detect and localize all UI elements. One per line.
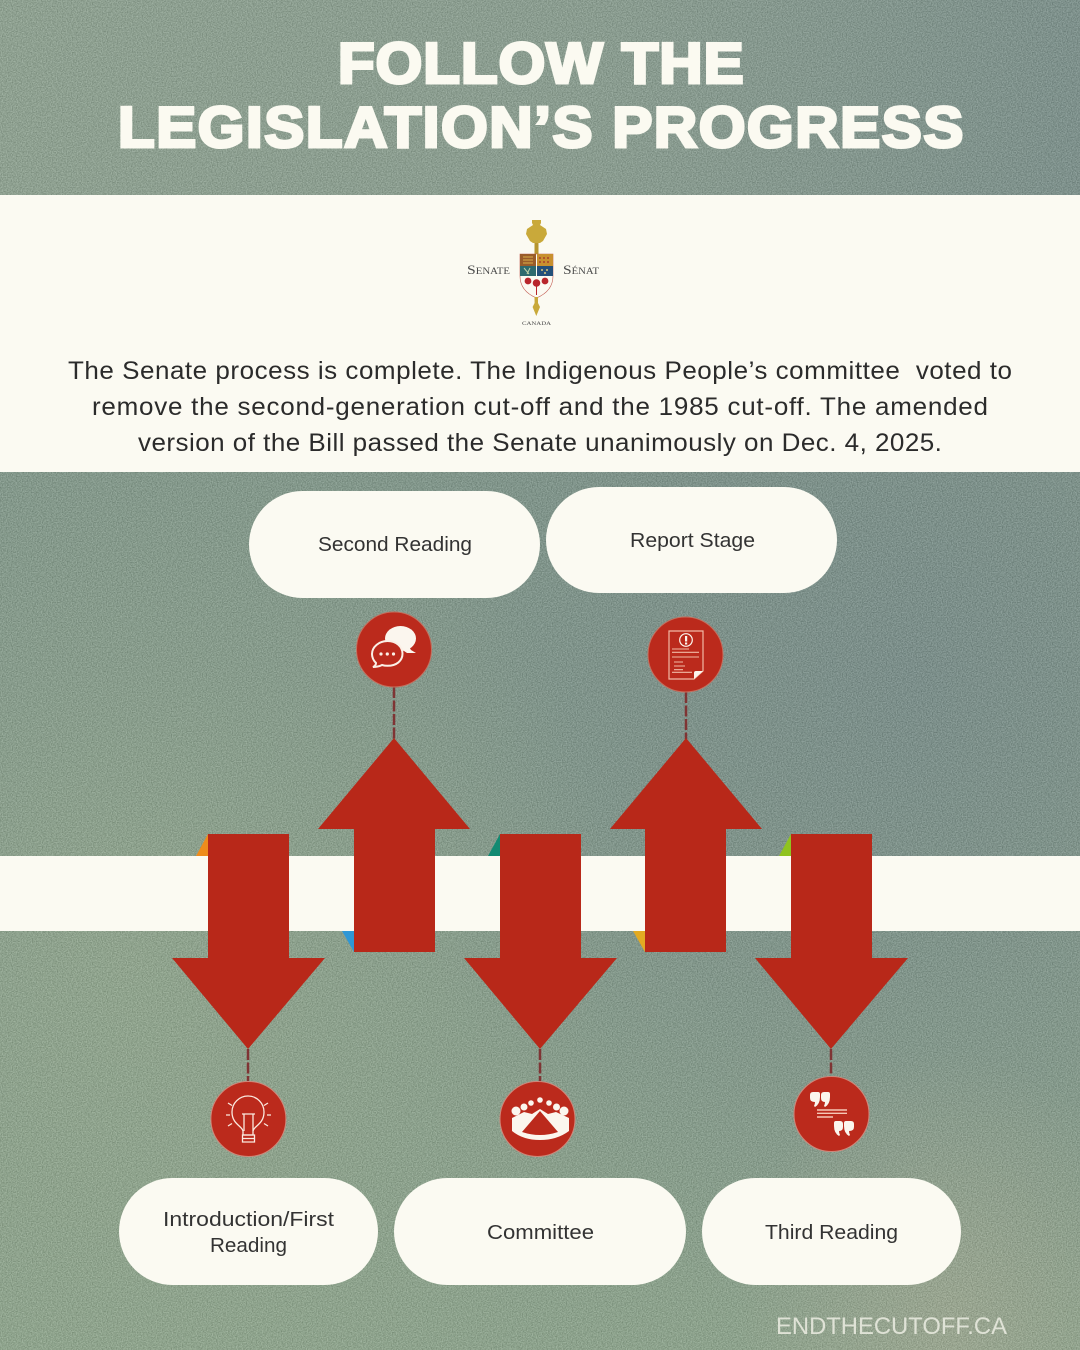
pill: second reading [249, 491, 540, 598]
icon: speech bubbles [356, 612, 432, 687]
mace foot [533, 297, 540, 316]
title: LEGISLATION’S PROGRESS [118, 96, 963, 160]
pill: report stage: Report Stage [630, 529, 755, 552]
arrow: introduction down [172, 834, 325, 1049]
icon: committee table [500, 1082, 575, 1156]
pill: second reading: Second Reading [318, 533, 472, 556]
title [118, 32, 963, 160]
arrow: third reading down [755, 834, 908, 1049]
icon: quotation marks [794, 1076, 869, 1152]
pill: introduction first reading: Reading [210, 1234, 287, 1257]
title: FOLLOW THE [338, 32, 744, 96]
timeline band [0, 856, 1080, 931]
icon: document [648, 617, 723, 692]
pill: third reading [702, 1178, 961, 1285]
mace crown [526, 220, 547, 243]
connectors [248, 687, 831, 1083]
status paragraph: The Senate process is complete. The Indigenous People’s committee voted to [68, 357, 1012, 385]
logo wordmarks: CANADA [522, 321, 551, 327]
arrow: second reading up [318, 738, 470, 952]
website footer: ENDTHECUTOFF.CA [776, 1313, 1007, 1340]
timeline colour accents [196, 834, 791, 952]
pill: committee [394, 1178, 686, 1285]
logo wordmarks [467, 262, 600, 327]
pill: introduction first reading [119, 1178, 378, 1285]
pill: committee: Committee [487, 1221, 594, 1244]
panel: senate status [0, 195, 1080, 472]
arrow: report stage up [610, 738, 762, 952]
status paragraph [68, 357, 1012, 457]
pill: third reading: Third Reading [765, 1221, 898, 1244]
pill: introduction first reading: Introduction/First [163, 1208, 334, 1231]
icon: light bulb [211, 1082, 286, 1156]
logo wordmarks: SENATE [467, 262, 511, 277]
coat of arms shield [520, 254, 553, 298]
status paragraph: version of the Bill passed the Senate unanimously on Dec. 4, 2025. [138, 429, 942, 457]
status paragraph: remove the second-generation cut-off and the 1985 cut-off. The amended [92, 393, 988, 421]
arrow: committee down [464, 834, 617, 1049]
logo: Senate of Canada [467, 220, 600, 327]
logo wordmarks: SÉNAT [563, 262, 600, 277]
pill: report stage [546, 487, 837, 593]
